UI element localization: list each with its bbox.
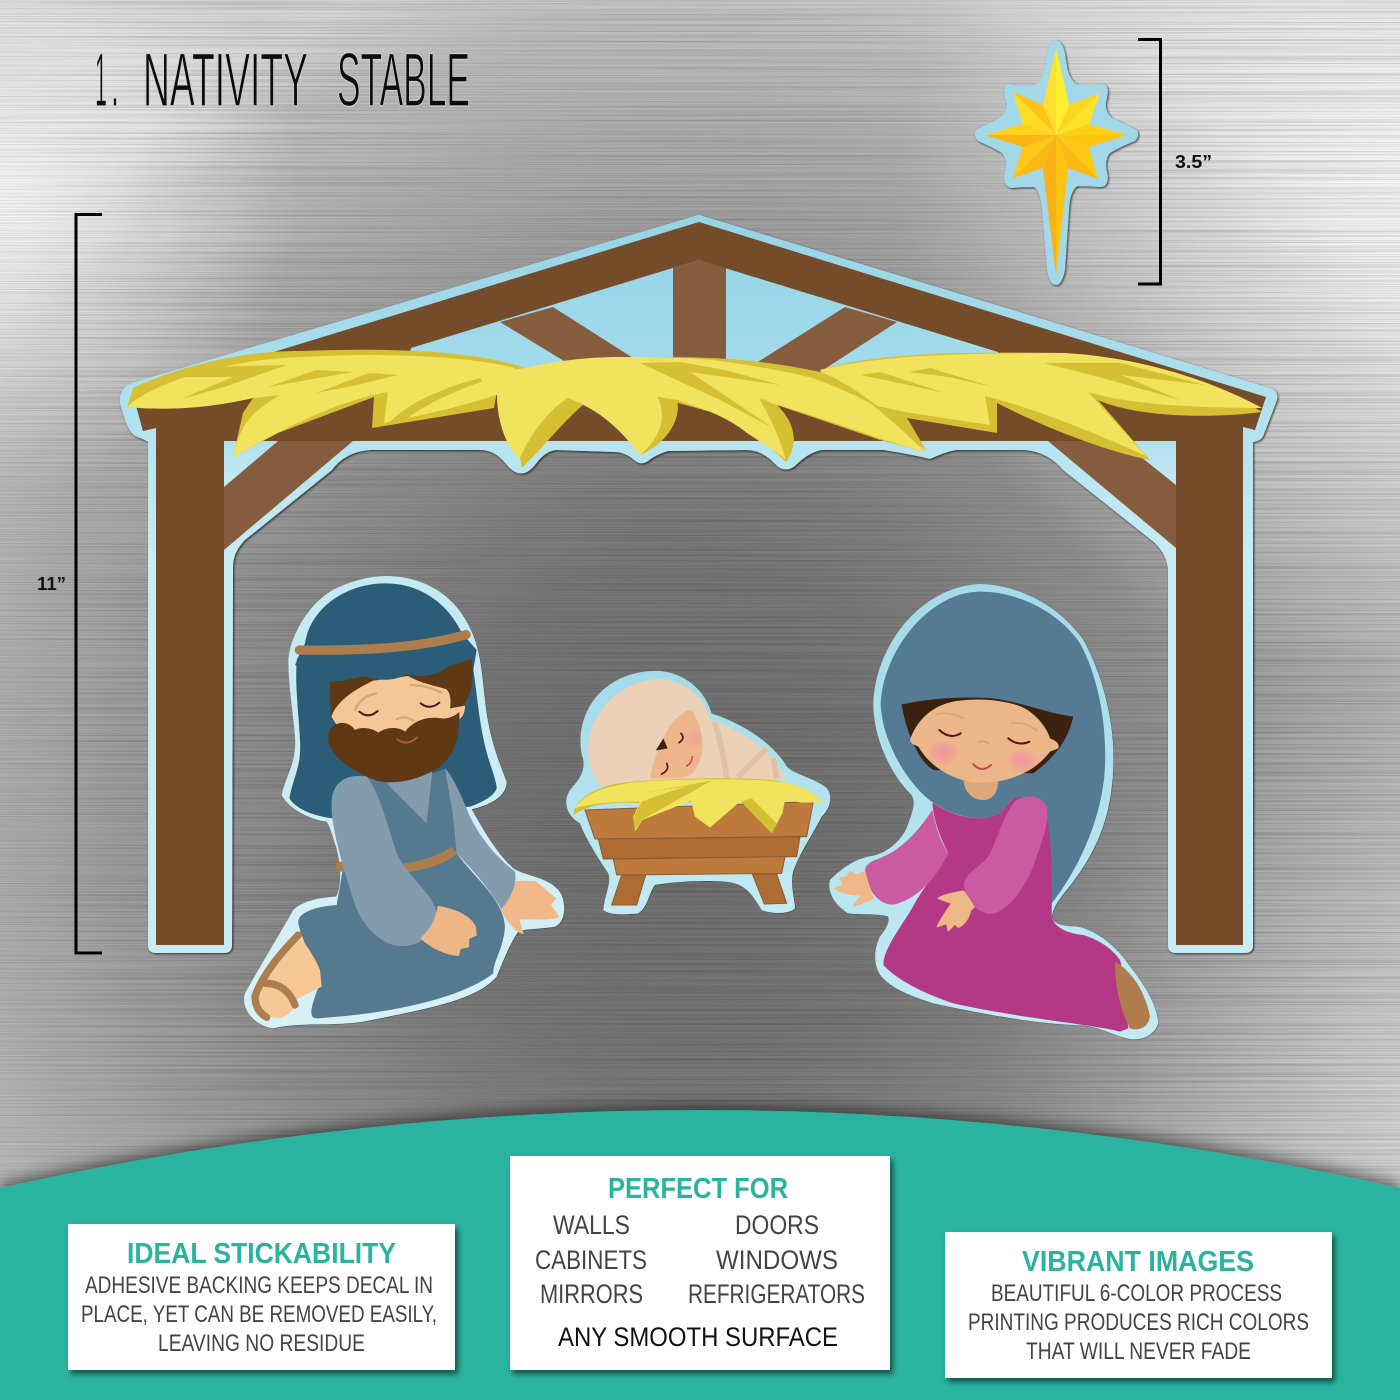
manger straw [573, 778, 822, 833]
panel: perfect for [510, 1156, 890, 1370]
right strut [742, 307, 897, 372]
panel: ideal stickability [68, 1224, 455, 1370]
dimension label: 11 inches: 11” [37, 574, 66, 594]
thatch: left clump [127, 350, 525, 457]
cheeks [927, 739, 959, 766]
scarf front flap [295, 637, 477, 681]
baby mouth [687, 757, 692, 766]
face [331, 676, 465, 747]
body text [81, 1272, 437, 1357]
surfaces list: DOORS [735, 1210, 819, 1240]
lower-right brace [1048, 441, 1176, 548]
baby cheek [685, 728, 704, 748]
body text: PRINTING PRODUCES RICH COLORS [968, 1309, 1309, 1336]
Mary sticker outline [829, 584, 1158, 1039]
hair [330, 658, 473, 720]
panel: baby in manger decal [566, 671, 830, 914]
sandal straps [255, 935, 298, 1017]
heading: VIBRANT IMAGES [1022, 1246, 1254, 1278]
dimension bracket: stable height [76, 214, 102, 953]
hand on lap [937, 891, 974, 931]
right cheek [1006, 748, 1038, 773]
centre king post [673, 260, 726, 372]
surfaces list: REFRIGERATORS [688, 1279, 865, 1309]
body text [968, 1280, 1309, 1365]
belt [341, 850, 454, 872]
front sleeve [332, 776, 437, 946]
beard [328, 712, 459, 782]
Joseph sticker outline [244, 576, 564, 1028]
teal footer curve [0, 1110, 1400, 1400]
surfaces list: CABINETS [535, 1245, 647, 1275]
thatch: centre clump [480, 357, 925, 468]
baby hair [656, 738, 668, 751]
title: NATIVITY [143, 38, 308, 123]
robe collar [387, 767, 433, 823]
foot [253, 932, 322, 1018]
blanket folds [714, 722, 777, 778]
panel: Mary decal [829, 584, 1158, 1039]
roof beam covering lower section [390, 385, 1010, 441]
veil [881, 592, 1105, 903]
sky panels [224, 255, 1176, 490]
dress [883, 797, 1128, 1032]
surfaces list: WINDOWS [716, 1245, 838, 1275]
head band [299, 635, 466, 650]
eyebrows and nose [355, 685, 442, 721]
face [910, 699, 1059, 783]
panel: Joseph decal [244, 576, 564, 1028]
robe [298, 768, 505, 1018]
roof beams and posts [133, 222, 1266, 945]
back sleeve [445, 768, 515, 910]
body text: PLACE, YET CAN BE REMOVED EASILY, [81, 1301, 437, 1328]
headscarf [289, 583, 497, 818]
body text: LEAVING NO RESIDUE [158, 1330, 365, 1357]
thatch: right clump [820, 353, 1262, 460]
manger legs [612, 874, 787, 905]
mouth [397, 737, 417, 743]
dimension label: 3.5 inches: 3.5” [1175, 152, 1212, 172]
swaddling blanket [588, 679, 787, 785]
manger sticker outline [566, 671, 830, 914]
hair [902, 697, 1073, 773]
dimension bracket: star height [1138, 40, 1160, 284]
closed eyes [939, 730, 1029, 744]
body text: THAT WILL NEVER FADE [1026, 1338, 1251, 1365]
heading: PERFECT FOR [608, 1173, 788, 1205]
surfaces list: WALLS [553, 1210, 630, 1240]
closed eyes [359, 703, 439, 715]
hand on knee [422, 907, 476, 955]
baby eyes [662, 733, 683, 774]
body text: BEAUTIFUL 6-COLOR PROCESS [991, 1280, 1282, 1307]
body text: ADHESIVE BACKING KEEPS DECAL IN [85, 1272, 433, 1299]
icon: christmas star [975, 40, 1138, 285]
surfaces list [535, 1210, 865, 1309]
panel: vibrant images [945, 1232, 1332, 1378]
left strut [500, 307, 640, 372]
left sleeve [865, 810, 948, 905]
neck [963, 779, 998, 800]
brows and nose [937, 713, 1037, 743]
manger lower board [613, 857, 785, 875]
any smooth surface: ANY SMOOTH SURFACE [558, 1322, 838, 1352]
outstretched hand [502, 882, 558, 933]
shoe [1115, 962, 1150, 1029]
manger middle board [598, 837, 800, 859]
lower-left brace [224, 441, 353, 550]
title: . [111, 38, 119, 123]
manger top board [585, 802, 813, 839]
panel: stable decal [120, 215, 1277, 953]
surfaces list: MIRRORS [540, 1279, 643, 1309]
stable sticker outline [120, 215, 1277, 953]
title: 1 [95, 38, 107, 123]
text: STABLE [337, 38, 470, 123]
heading: IDEAL STICKABILITY [127, 1238, 396, 1270]
outstretched hand [835, 872, 873, 906]
right sleeve [964, 796, 1047, 914]
baby face [650, 710, 702, 778]
mouth [973, 764, 991, 769]
